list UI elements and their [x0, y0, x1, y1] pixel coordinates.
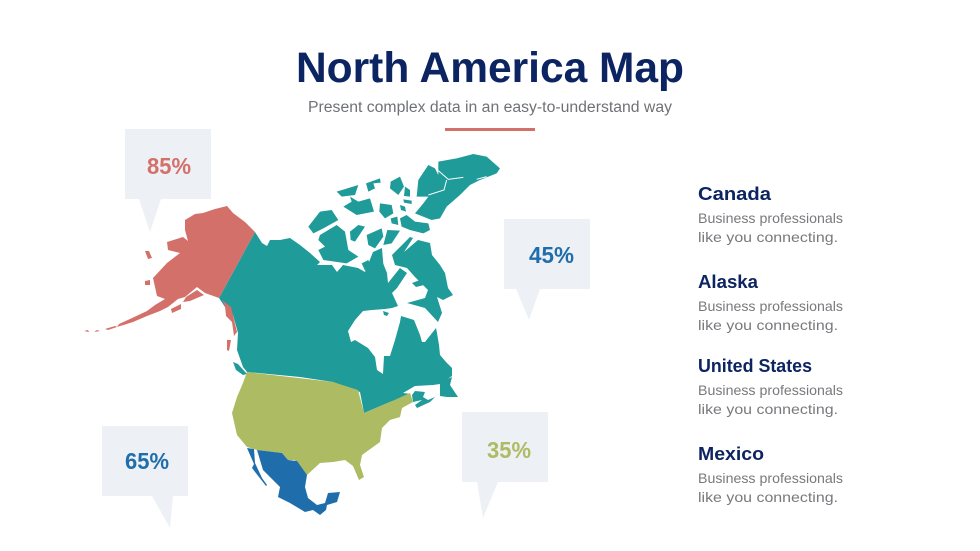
callout: Mexico 65%: 65%: [125, 448, 169, 474]
legend: Alaska: Business professionals: [698, 298, 843, 314]
legend: Canada: Canada: [698, 183, 772, 204]
legend: Canada: like you connecting.: [698, 229, 838, 245]
legend: Alaska: like you connecting.: [698, 317, 838, 333]
callout: Canada 45%: [504, 219, 590, 320]
callout: United States 35%: [462, 412, 548, 518]
region: Mexico: [247, 448, 340, 515]
legend: Mexico: like you connecting.: [698, 489, 838, 505]
callout: Alaska 85%: 85%: [147, 153, 191, 179]
legend: Alaska: Alaska: [698, 271, 759, 292]
title: North America Map: [296, 44, 684, 92]
legend: Mexico: [698, 443, 843, 505]
callout: Mexico 65%: [102, 426, 188, 528]
legend: United States: [698, 355, 843, 417]
callout: United States 35%: 35%: [487, 437, 531, 463]
region: United States: [232, 372, 413, 480]
accent rule under subtitle: [445, 128, 535, 131]
legend: United States: like you connecting.: [698, 401, 838, 417]
callout: Alaska 85%: [125, 129, 211, 232]
legend: United States: Business professionals: [698, 382, 843, 398]
subtitle: Present complex data in an easy-to-understand way: [308, 99, 672, 116]
legend: Mexico: Mexico: [698, 443, 764, 464]
callout: Canada 45%: 45%: [529, 242, 574, 268]
legend: Canada: Business professionals: [698, 210, 843, 226]
region: Alaska: [84, 206, 255, 351]
legend: Alaska: [698, 271, 843, 333]
map: North America: [84, 154, 500, 515]
legend: United States: United States: [698, 355, 812, 376]
legend: Mexico: Business professionals: [698, 470, 843, 486]
region: Canada: [219, 154, 500, 413]
fjord cuts in Ellesmere Island: [428, 171, 487, 195]
legend: Canada: [698, 183, 843, 245]
